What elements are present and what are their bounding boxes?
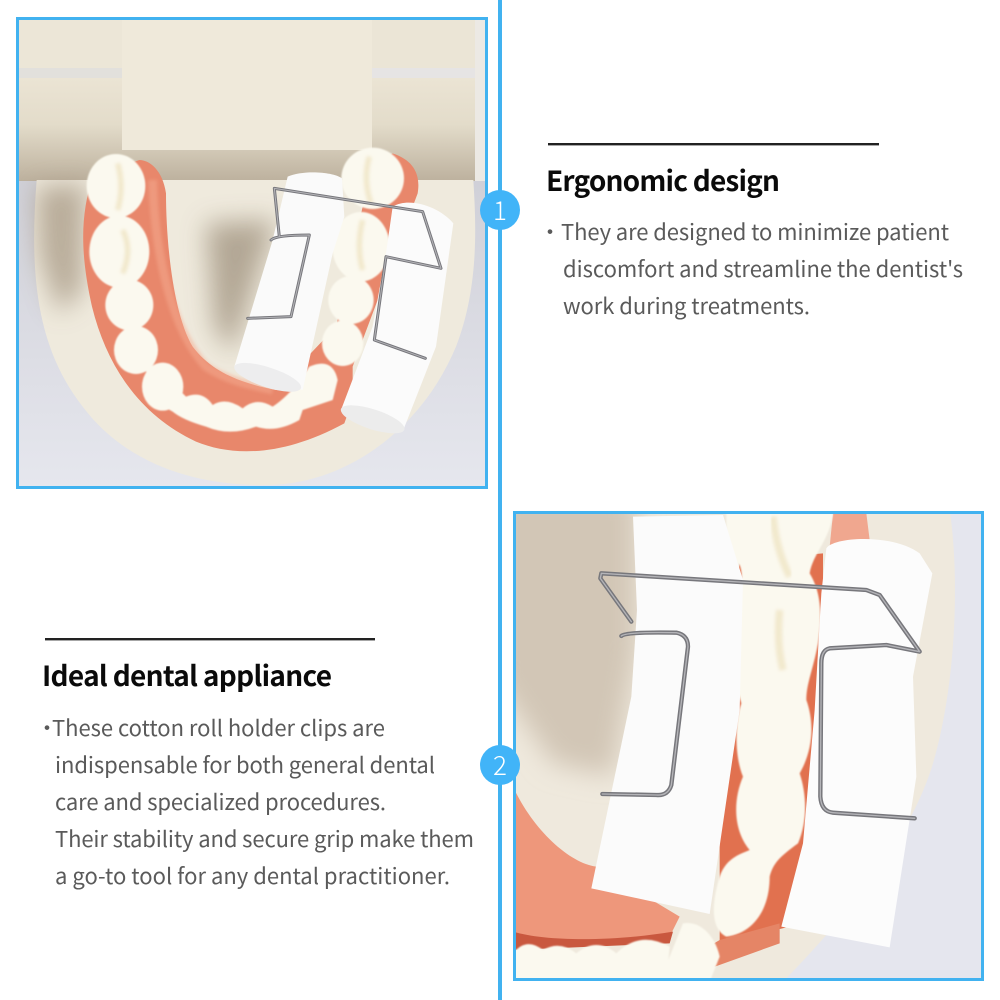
body text: ideal dental appliance: a go-to tool for any dental practitioner. xyxy=(55,859,450,891)
body text: ideal dental appliance: · xyxy=(36,711,58,743)
panel 1 border xyxy=(18,18,486,488)
body text: ergonomic design: They are designed to minimize patient xyxy=(561,215,949,247)
model tray xyxy=(34,180,475,485)
body text: ergonomic design: work during treatments. xyxy=(563,289,810,321)
step badge 1: 1 xyxy=(493,191,507,228)
body text: ergonomic design: · xyxy=(539,215,561,247)
body text: ergonomic design xyxy=(539,215,963,321)
section: ideal dental appliance xyxy=(36,638,474,891)
heading: ideal dental appliance: Ideal dental appliance xyxy=(42,655,332,695)
panel: close-up photo of clip xyxy=(516,514,981,978)
step badge 2 xyxy=(480,745,520,785)
panel: full dental model photo xyxy=(16,17,488,489)
close-up cotton roll left xyxy=(591,515,743,914)
close-up teeth xyxy=(513,513,833,982)
panel 2 border xyxy=(514,512,982,980)
body text: ergonomic design: discomfort and streamline the dentist's xyxy=(563,252,963,284)
cotton roll left xyxy=(231,172,344,398)
body text: ideal dental appliance: These cotton roll holder clips are xyxy=(52,711,385,743)
section: ergonomic design xyxy=(539,143,963,321)
body text: ideal dental appliance xyxy=(36,711,474,891)
gum arch xyxy=(83,153,418,451)
teeth xyxy=(87,148,404,432)
close-up cotton roll right xyxy=(781,539,932,947)
body text: ideal dental appliance: care and specialized procedures. xyxy=(55,785,386,817)
body text: ideal dental appliance: indispensable for both general dental xyxy=(55,748,435,780)
wire clip xyxy=(248,188,441,358)
heading: ergonomic design: Ergonomic design xyxy=(546,160,780,200)
close-up gum xyxy=(513,513,870,982)
body text: ideal dental appliance: Their stability and secure grip make them xyxy=(55,822,474,854)
close-up background xyxy=(516,514,981,978)
close-up wire clip xyxy=(600,573,920,818)
model base blocks xyxy=(16,17,488,181)
step badge 2: 2 xyxy=(493,746,507,783)
step badge 1 xyxy=(480,190,520,230)
vertical timeline xyxy=(498,0,502,1000)
cotton roll right xyxy=(338,203,453,439)
